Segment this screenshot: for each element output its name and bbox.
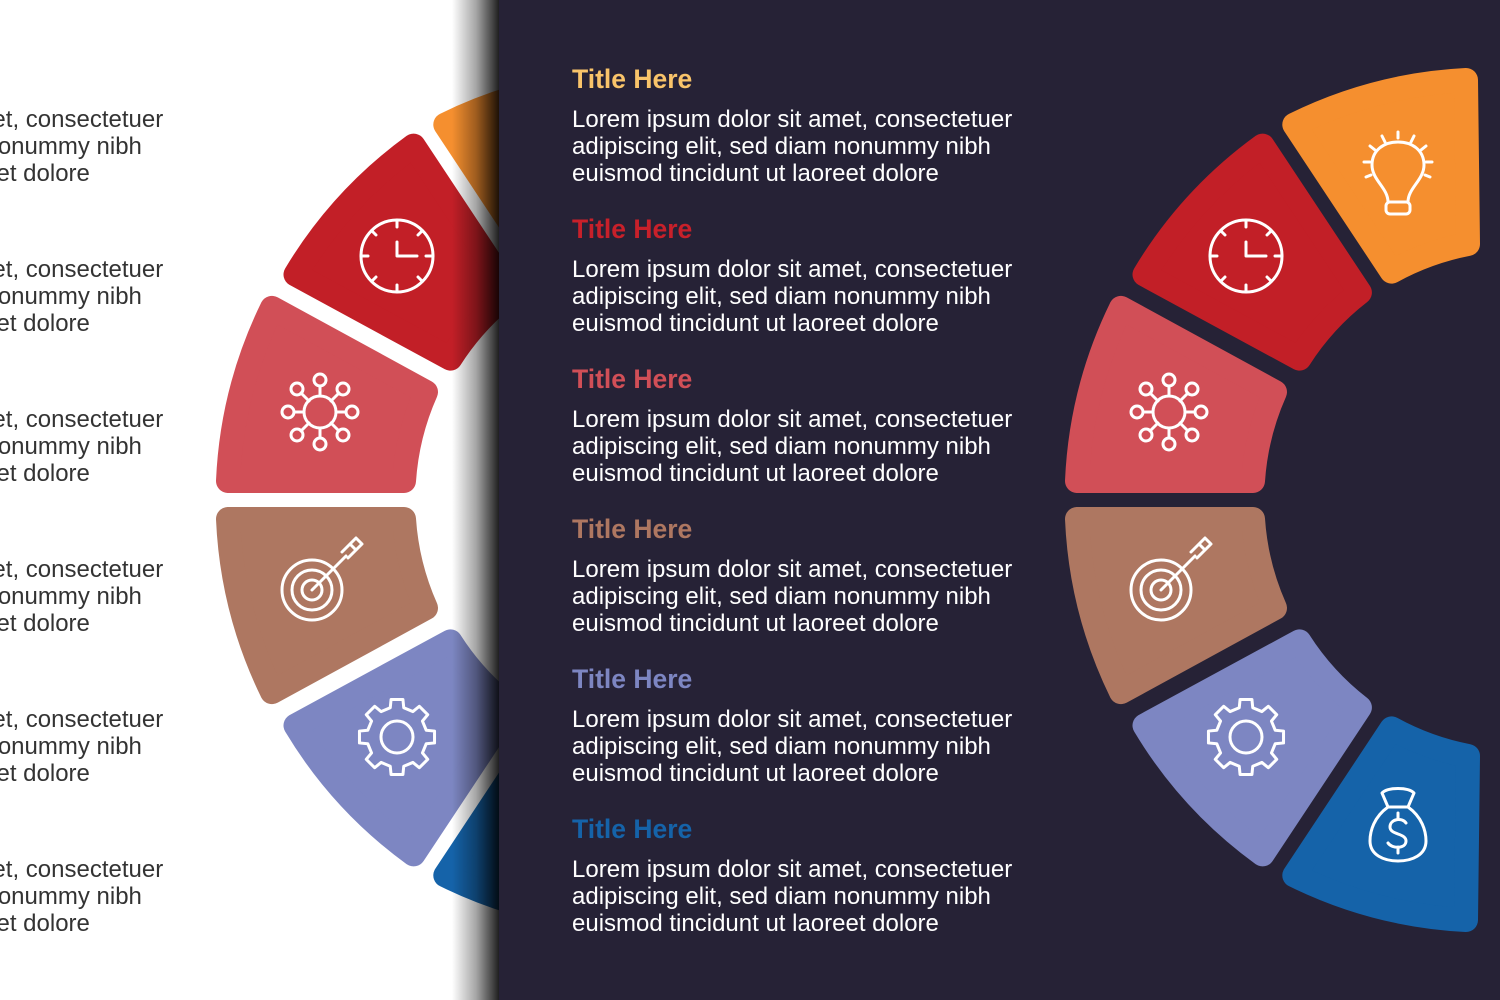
panel: left light background [0,0,500,1000]
text block: item 3 [572,364,1012,487]
text block: item 5: euismod tincidunt ut laoreet dolore [572,760,939,787]
text block: item 6: Lorem ipsum dolor sit amet, consectetuer [572,856,1012,883]
text block: item 1 [572,64,1012,187]
text block: item 1: euismod tincidunt ut laoreet dolore [572,160,939,187]
text block: item 1: adipiscing elit, sed diam nonummy nibh [572,133,991,160]
panel: dark main slide [499,0,1500,1000]
text block: item 3: euismod tincidunt ut laoreet dolore [572,460,939,487]
text block: item 4: adipiscing elit, sed diam nonummy nibh [572,583,991,610]
text block: item 2: Lorem ipsum dolor sit amet, consectetuer [572,256,1012,283]
text block: item 4: Title Here [572,514,692,544]
text block: item 6: euismod tincidunt ut laoreet dolore [572,910,939,937]
diagram: segmented half-ring with icons [1077,80,1468,920]
text block: item 2 [572,214,1012,337]
text block: item 2: euismod tincidunt ut laoreet dolore [572,310,939,337]
text block: item 5 [572,664,1012,787]
diagram: left faded copy of wheel [228,80,619,920]
text block: item 6: Title Here [572,814,692,844]
text block: item 4: euismod tincidunt ut laoreet dolore [572,610,939,637]
text block: item 6: adipiscing elit, sed diam nonummy nibh [572,883,991,910]
text block: item 3: adipiscing elit, sed diam nonummy nibh [572,433,991,460]
text block: item 5: Title Here [572,664,692,694]
text block: item 2: Title Here [572,214,692,244]
text block: item 2: adipiscing elit, sed diam nonummy nibh [572,283,991,310]
text block: item 5: Lorem ipsum dolor sit amet, consectetuer [572,706,1012,733]
text block: item 3: Title Here [572,364,692,394]
text block: item 1: Lorem ipsum dolor sit amet, consectetuer [572,106,1012,133]
text block: item 3: Lorem ipsum dolor sit amet, consectetuer [572,406,1012,433]
text block: left cut-off descriptions [0,106,163,937]
text block: item 1: Title Here [572,64,692,94]
text block: item 4 [572,514,1012,637]
text block: item 6 [572,814,1012,937]
shadow: page edge [452,0,500,1000]
text block: item 5: adipiscing elit, sed diam nonummy nibh [572,733,991,760]
text block: item 4: Lorem ipsum dolor sit amet, consectetuer [572,556,1012,583]
